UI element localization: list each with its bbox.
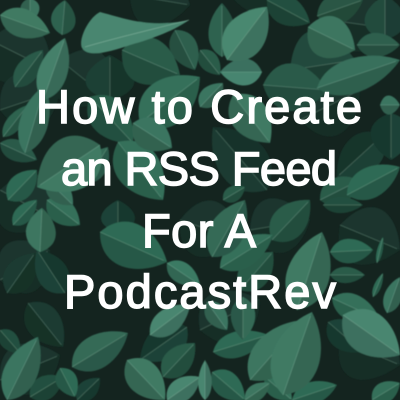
- title: How to Create: [36, 80, 362, 133]
- title: PodcastRev: [64, 265, 336, 318]
- title: For A: [142, 204, 257, 257]
- title: an RSS Feed: [61, 142, 337, 195]
- title: [36, 80, 362, 318]
